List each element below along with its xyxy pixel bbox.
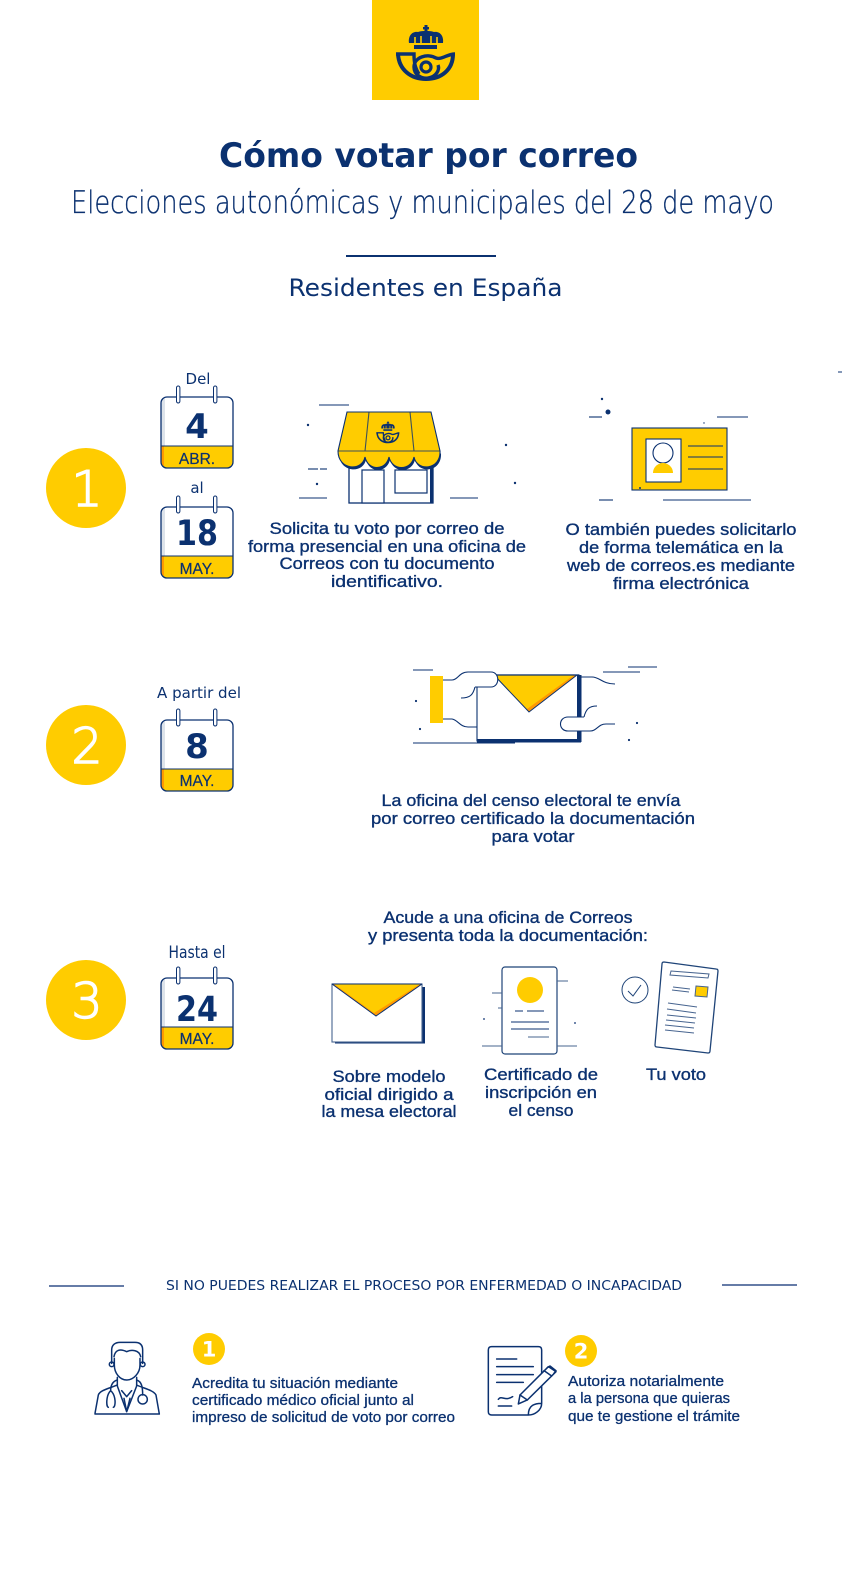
step 3 number [46, 960, 126, 1040]
section heading: Residentes en España [288, 274, 562, 302]
title: Cómo votar por correo [219, 136, 638, 176]
calendar: a partir del 8 may: A partir del [157, 684, 241, 702]
calendar: al 18 may [161, 479, 233, 578]
icon: envelope [332, 984, 425, 1044]
text: request in person: forma presencial en una oficina de [248, 537, 526, 556]
text: medical certificate: certificado médico oficial junto al [192, 1392, 414, 1409]
text: request online [566, 520, 796, 593]
step 3 number: 3 [71, 973, 103, 1030]
calendar: a partir del 8 may: MAY. [180, 773, 214, 790]
heading: go to office: Acude a una oficina de Correos [384, 908, 632, 927]
icon: document and pen [488, 1347, 556, 1415]
icon: hands passing envelope [413, 667, 657, 743]
label: certificate: Certificado de [484, 1065, 598, 1084]
text: medical certificate: impreso de solicitud de voto por correo [192, 1409, 455, 1426]
calendar: a partir del 8 may [157, 684, 241, 791]
text: request in person: Correos con tu documento [280, 554, 494, 573]
logo [372, 0, 479, 100]
text: census office sends documents: La oficina del censo electoral te envía [382, 791, 681, 810]
text: request in person: identificativo. [331, 572, 443, 591]
text: request online: web de correos.es mediante [566, 556, 795, 575]
heading: go to office [368, 908, 648, 945]
label: certificate: el censo [508, 1101, 574, 1120]
text: census office sends documents: por correo certificado la documentación [371, 809, 695, 828]
number badge 1 [193, 1333, 225, 1365]
calendar: del 4 abr: Del [186, 370, 210, 388]
calendar: hasta el 24 may: MAY. [180, 1031, 214, 1048]
step 1 number [46, 448, 126, 528]
text: request in person [248, 519, 526, 591]
calendar: hasta el 24 may: 24 [176, 990, 218, 1030]
calendar: a partir del 8 may: 8 [185, 727, 209, 767]
icon: ballot [655, 962, 718, 1053]
text: notary authorisation [568, 1373, 740, 1425]
text: census office sends documents: para votar [492, 827, 575, 846]
text: request online: firma electrónica [613, 574, 750, 593]
text: medical certificate [192, 1375, 455, 1426]
label: envelope: oficial dirigido a [324, 1085, 454, 1104]
heading: go to office: y presenta toda la documentación: [368, 926, 648, 945]
icon: census certificate [482, 967, 577, 1054]
text: request in person: Solicita tu voto por correo de [270, 519, 504, 538]
calendar: al 18 may: MAY. [180, 561, 214, 578]
label: ballot: Tu voto [646, 1065, 706, 1084]
number badge 1: 1 [202, 1338, 216, 1362]
label: envelope: Sobre modelo [332, 1067, 446, 1086]
icon: post office [299, 405, 516, 503]
calendar: del 4 abr: 4 [185, 407, 209, 447]
label: envelope: la mesa electoral [322, 1102, 456, 1121]
step 2 number: 2 [71, 718, 103, 775]
calendar: del 4 abr [161, 370, 233, 468]
illness section heading: SI NO PUEDES REALIZAR EL PROCESO POR ENFERMEDAD O INCAPACIDAD [166, 1278, 682, 1294]
text: request online: O también puedes solicitarlo [566, 520, 796, 539]
label: envelope [322, 1067, 456, 1121]
step 2 number [46, 705, 126, 785]
calendar: hasta el 24 may: Hasta el [168, 943, 226, 962]
icon: check mark [622, 977, 648, 1003]
label: certificate [484, 1065, 598, 1120]
text: medical certificate: Acredita tu situación mediante [192, 1375, 398, 1392]
calendar: al 18 may: al [190, 479, 204, 497]
text: notary authorisation: a la persona que quieras [568, 1390, 730, 1407]
icon: doctor [95, 1342, 159, 1414]
calendar: hasta el 24 may [161, 943, 233, 1049]
text: census office sends documents [371, 791, 695, 846]
text: request online: de forma telemática en la [579, 538, 784, 557]
icon: id card [589, 398, 751, 500]
number badge 2 [565, 1335, 597, 1367]
text: notary authorisation: que te gestione el trámite [568, 1408, 740, 1425]
step 1 number: 1 [71, 461, 103, 518]
label: certificate: inscripción en [485, 1083, 597, 1102]
number badge 2: 2 [574, 1340, 588, 1364]
calendar: del 4 abr: ABR. [179, 451, 215, 468]
text: notary authorisation: Autoriza notarialmente [568, 1373, 724, 1390]
calendar: al 18 may: 18 [176, 514, 218, 554]
